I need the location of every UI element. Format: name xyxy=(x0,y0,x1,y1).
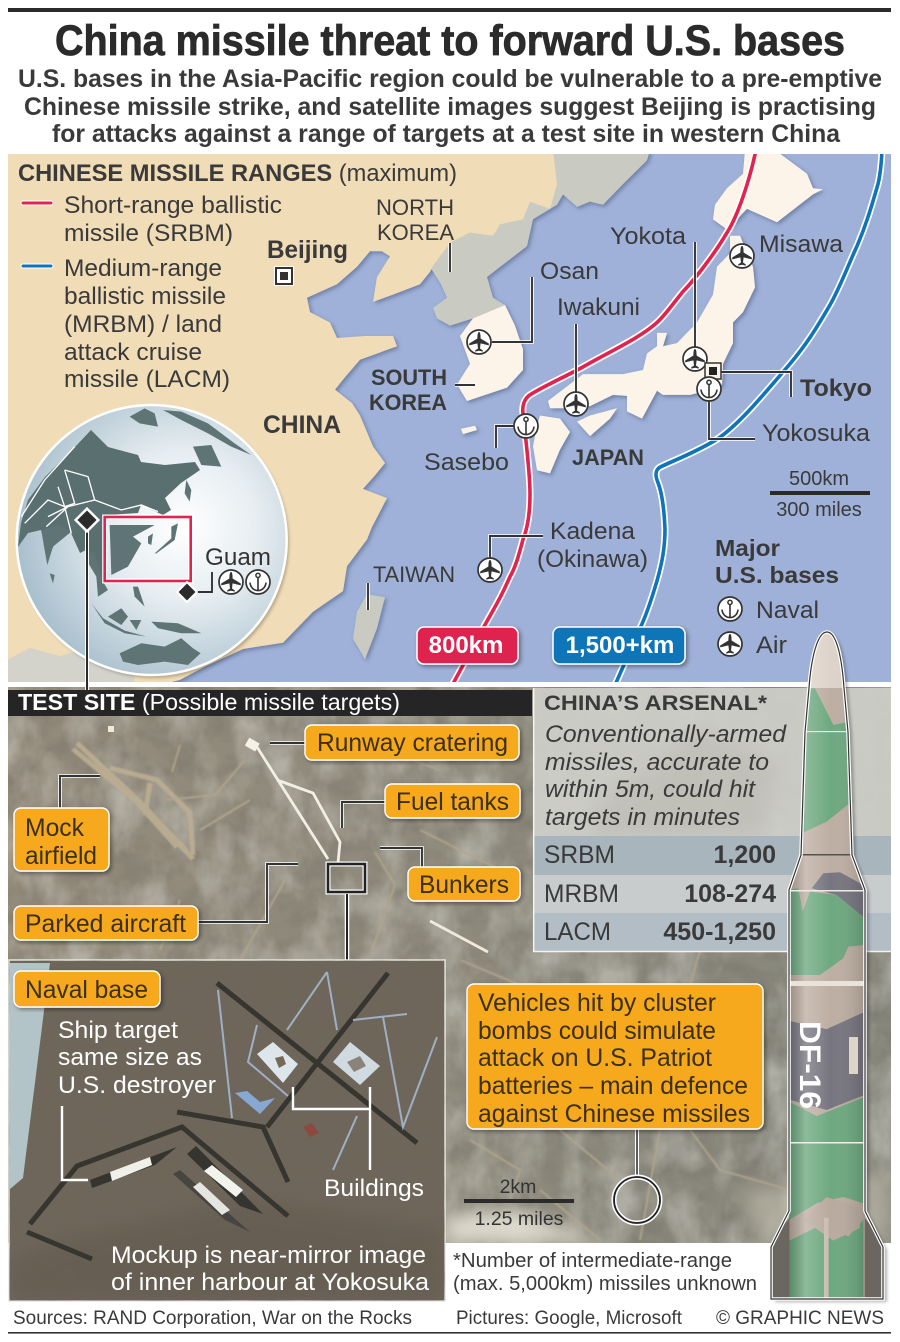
callout: vehicles: batteries – main defence xyxy=(478,1072,748,1100)
table rows: MRBM xyxy=(544,880,619,908)
callout: vehicles: against Chinese missiles xyxy=(478,1100,750,1128)
base: Sasebo xyxy=(424,414,538,476)
base: Kadena: (Okinawa) xyxy=(537,546,648,573)
subtitle: U.S. bases in the Asia-Pacific region could be vulnerable to a pre-emptive xyxy=(18,65,882,93)
locator globe xyxy=(17,405,289,678)
label: Beijing xyxy=(267,236,348,286)
callout: parked aircraft xyxy=(14,864,298,940)
credits: Pictures: Google, Microsoft xyxy=(456,1308,683,1329)
table rows: LACM xyxy=(544,918,611,946)
table rows: 450-1,250 xyxy=(663,918,776,946)
legend: SRBM: missile (SRBM) xyxy=(64,220,233,247)
base: Kadena xyxy=(478,518,648,582)
label: Taiwan: TAIWAN xyxy=(373,562,455,587)
inset: roads and piers xyxy=(27,973,417,1259)
legend: major U.S. bases: Naval xyxy=(756,597,819,624)
legend: MRBM / LACM: missile (LACM) xyxy=(64,366,230,393)
subtitle xyxy=(18,65,882,148)
scale bar: map xyxy=(770,468,870,521)
panel: China's arsenal: CHINA’S ARSENAL* xyxy=(544,691,768,715)
callout: mock airfield xyxy=(14,776,109,871)
top rule xyxy=(8,8,891,12)
site locator line xyxy=(76,509,98,692)
label: North Korea: NORTH xyxy=(376,195,454,220)
legend: MRBM / LACM: Medium-range xyxy=(64,255,222,282)
badge: 800km xyxy=(417,627,518,664)
test site header xyxy=(8,689,532,716)
badge: 1,500+km: 1,500+km xyxy=(566,632,674,659)
callout: buildings xyxy=(293,1087,424,1202)
panel: missile range map xyxy=(4,145,891,718)
callout: vehicles xyxy=(467,984,763,1223)
heading: Chinese missile ranges: CHINESE MISSILE RANGES (maximum) xyxy=(18,160,457,187)
test site header: TEST SITE (Possible missile targets) xyxy=(18,689,400,715)
callout: fuel tanks: Fuel tanks xyxy=(396,788,509,816)
badge: 800km: 800km xyxy=(429,632,503,659)
legend: SRBM: Short-range ballistic xyxy=(64,192,282,219)
label: Taiwan xyxy=(368,562,455,610)
legend: MRBM / LACM: (MRBM) / land xyxy=(64,311,222,338)
callout: vehicles: attack on U.S. Patriot xyxy=(478,1044,712,1072)
callout: mock airfield: Mock xyxy=(25,814,84,842)
missile: DF-16 xyxy=(770,630,889,1304)
naval base locator box xyxy=(328,864,365,960)
base: Yokosuka xyxy=(697,377,871,447)
label: North Korea: KOREA xyxy=(377,220,454,245)
callout: parked aircraft: Parked aircraft xyxy=(25,910,186,938)
base: Yokota xyxy=(610,223,707,371)
credits: Sources: RAND Corporation, War on the Rocks xyxy=(13,1308,412,1329)
table rows: SRBM xyxy=(544,841,615,869)
note: mockup xyxy=(111,1242,430,1296)
locator frame xyxy=(105,517,191,581)
callout: runway cratering xyxy=(270,725,519,760)
label: China: CHINA xyxy=(263,411,341,439)
footnote xyxy=(447,1243,891,1303)
legend: major U.S. bases: U.S. bases xyxy=(715,562,839,588)
globe: main Asian landmass xyxy=(18,430,200,582)
range line: 1,500+km MRBM xyxy=(605,145,882,708)
mock airfield xyxy=(73,743,193,859)
callout: buildings: Buildings xyxy=(324,1175,424,1202)
base: Misawa xyxy=(730,231,844,268)
label: Guam xyxy=(177,544,271,602)
subtitle: for attacks against a range of targets at a test site in western China xyxy=(52,120,841,148)
label: Tokyo xyxy=(705,363,872,402)
base: Sasebo: Sasebo xyxy=(424,449,509,476)
callout: naval base xyxy=(14,971,160,1007)
callout: vehicles: bombs could simulate xyxy=(478,1017,716,1045)
inset: buildings xyxy=(257,1042,298,1083)
table rows: 108-274 xyxy=(684,880,776,908)
legend: SRBM xyxy=(21,192,282,247)
label: South Korea: SOUTH xyxy=(371,365,447,390)
base: Iwakuni: Iwakuni xyxy=(557,294,640,321)
runway and tracks xyxy=(257,747,340,863)
base: Misawa: Misawa xyxy=(759,231,844,258)
panel: China's arsenal: Conventionally-armed xyxy=(545,721,787,748)
map land masses xyxy=(4,150,823,718)
label: South Korea xyxy=(369,365,475,415)
label: Tokyo: Tokyo xyxy=(800,375,872,402)
legend: major U.S. bases xyxy=(715,535,839,659)
range line: 800km SRBM xyxy=(440,145,757,708)
legend: MRBM / LACM xyxy=(21,255,230,393)
credits xyxy=(13,1308,884,1329)
label: Beijing: Beijing xyxy=(267,236,348,264)
base: Iwakuni xyxy=(557,294,640,416)
panel: China's arsenal: targets in minutes xyxy=(545,804,740,831)
callout: fuel tanks xyxy=(342,784,520,828)
scale bar: map: 300 miles xyxy=(776,499,862,521)
callout: naval base: Naval base xyxy=(25,976,148,1004)
footnote: (max. 5,000km) missiles unknown xyxy=(453,1272,757,1295)
scale bar: test site: 2km xyxy=(500,1176,536,1198)
callout: mock airfield: airfield xyxy=(25,842,97,870)
callout: runway cratering: Runway cratering xyxy=(317,729,508,757)
callout: bunkers: Bunkers xyxy=(419,871,509,899)
panel: China's arsenal: within 5m, could hit xyxy=(545,776,756,803)
label: Japan: JAPAN xyxy=(572,445,644,470)
base: Kadena: Kadena xyxy=(550,518,636,545)
scale bar: test site xyxy=(464,1176,574,1230)
legend: MRBM / LACM: ballistic missile xyxy=(64,283,226,310)
label: Guam: Guam xyxy=(205,544,271,571)
label: North Korea xyxy=(376,195,454,272)
inset: ship targets xyxy=(90,1147,177,1188)
inset labels: U.S. destroyer xyxy=(58,1072,216,1099)
callout: bunkers xyxy=(380,848,520,901)
scale bar: map: 500km xyxy=(789,468,849,490)
legend: major U.S. bases: Air xyxy=(756,632,787,659)
label: South Korea: KOREA xyxy=(369,390,447,415)
inset labels xyxy=(58,1017,216,1180)
legend: MRBM / LACM: attack cruise xyxy=(64,339,202,366)
panel: China's arsenal xyxy=(533,688,891,952)
base: Osan xyxy=(467,258,599,354)
panel: test site satellite image xyxy=(8,687,891,1243)
credits: © GRAPHIC NEWS xyxy=(716,1308,884,1329)
base: Osan: Osan xyxy=(540,258,599,285)
badge: 1,500+km xyxy=(553,627,685,664)
table rows: 1,200 xyxy=(713,841,776,869)
inset labels: same size as xyxy=(58,1044,202,1071)
note: mockup: of inner harbour at Yokosuka xyxy=(111,1269,430,1296)
scale bar: test site: 1.25 miles xyxy=(475,1208,564,1230)
table rows xyxy=(544,841,776,946)
legend: major U.S. bases: Major xyxy=(715,535,780,561)
panel: naval base inset xyxy=(9,960,445,1301)
camouflage xyxy=(788,688,865,975)
footnote: *Number of intermediate-range xyxy=(453,1249,732,1272)
panel: China's arsenal: missiles, accurate to xyxy=(545,749,769,776)
note: mockup: Mockup is near-mirror image xyxy=(111,1242,426,1269)
inset labels: Ship target xyxy=(58,1017,178,1044)
base: Yokosuka: Yokosuka xyxy=(762,420,871,447)
missile: DF-16: DF-16 xyxy=(793,1021,826,1109)
title: China missile threat to forward U.S. bases xyxy=(55,17,845,65)
callout: vehicles: Vehicles hit by cluster xyxy=(478,989,716,1017)
base: Yokota: Yokota xyxy=(610,223,687,250)
subtitle: Chinese missile strike, and satellite images suggest Beijing is practising xyxy=(24,93,876,121)
